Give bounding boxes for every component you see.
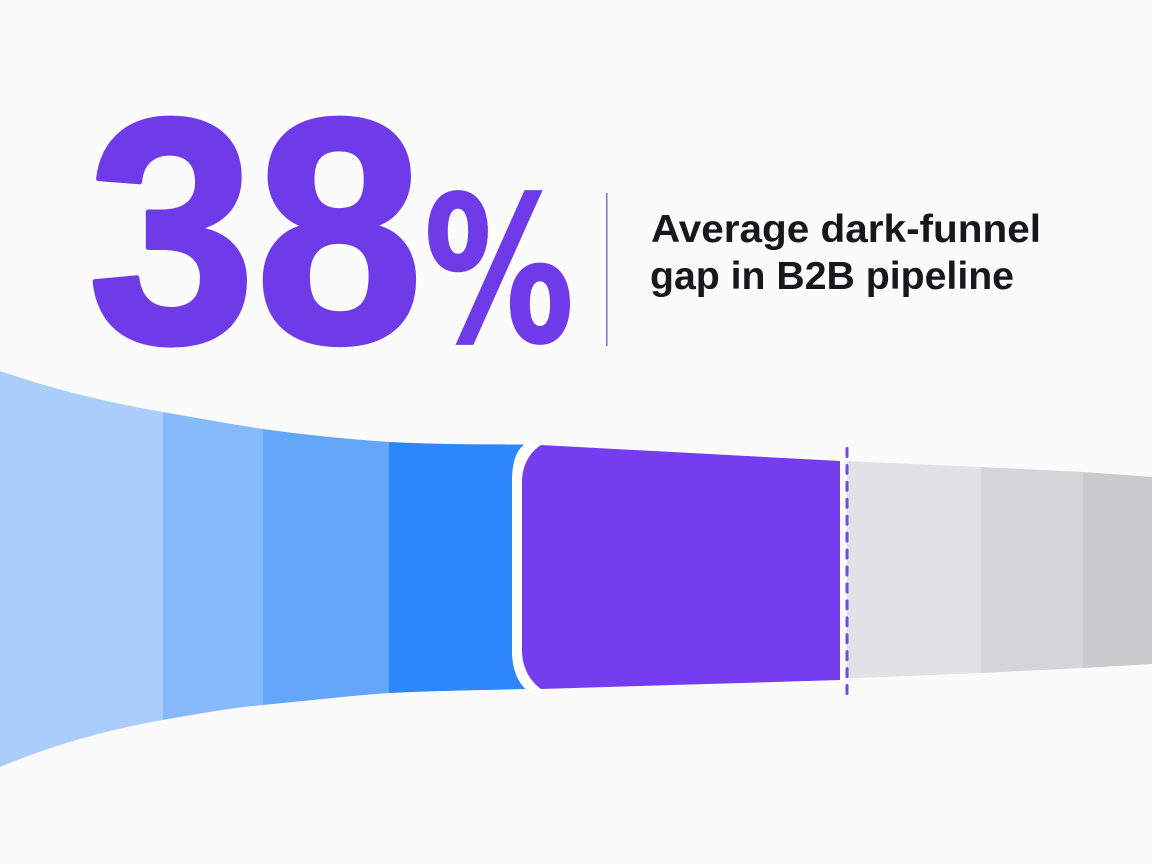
funnel band [0, 371, 1152, 767]
funnel stage 4: strong blue [389, 442, 535, 693]
after-gap stage 1: light grey [846, 461, 981, 678]
number 38: 38 [88, 52, 423, 410]
percent sign: % [424, 153, 574, 389]
funnel stage 1: lightest blue [0, 371, 163, 767]
background mask above and below the outline [505, 430, 560, 705]
white outline around gap [512, 438, 546, 695]
funnel stage 2 [163, 412, 263, 720]
vertical divider [606, 193, 608, 346]
big statistic: 38% [88, 52, 574, 410]
caption line 1: Average dark-funnel [651, 208, 1041, 251]
funnel stage 3 [263, 429, 389, 705]
highlighted gap segment: purple [522, 445, 840, 689]
caption [650, 208, 1041, 298]
white outline arc [516, 445, 532, 689]
after-gap stage 3 [1083, 472, 1152, 668]
white gap beside dashed marker [840, 458, 847, 682]
caption line 2: gap in B2B pipeline [650, 255, 1014, 298]
dashed marker line [846, 448, 848, 694]
after-gap stage 2 [981, 467, 1083, 673]
